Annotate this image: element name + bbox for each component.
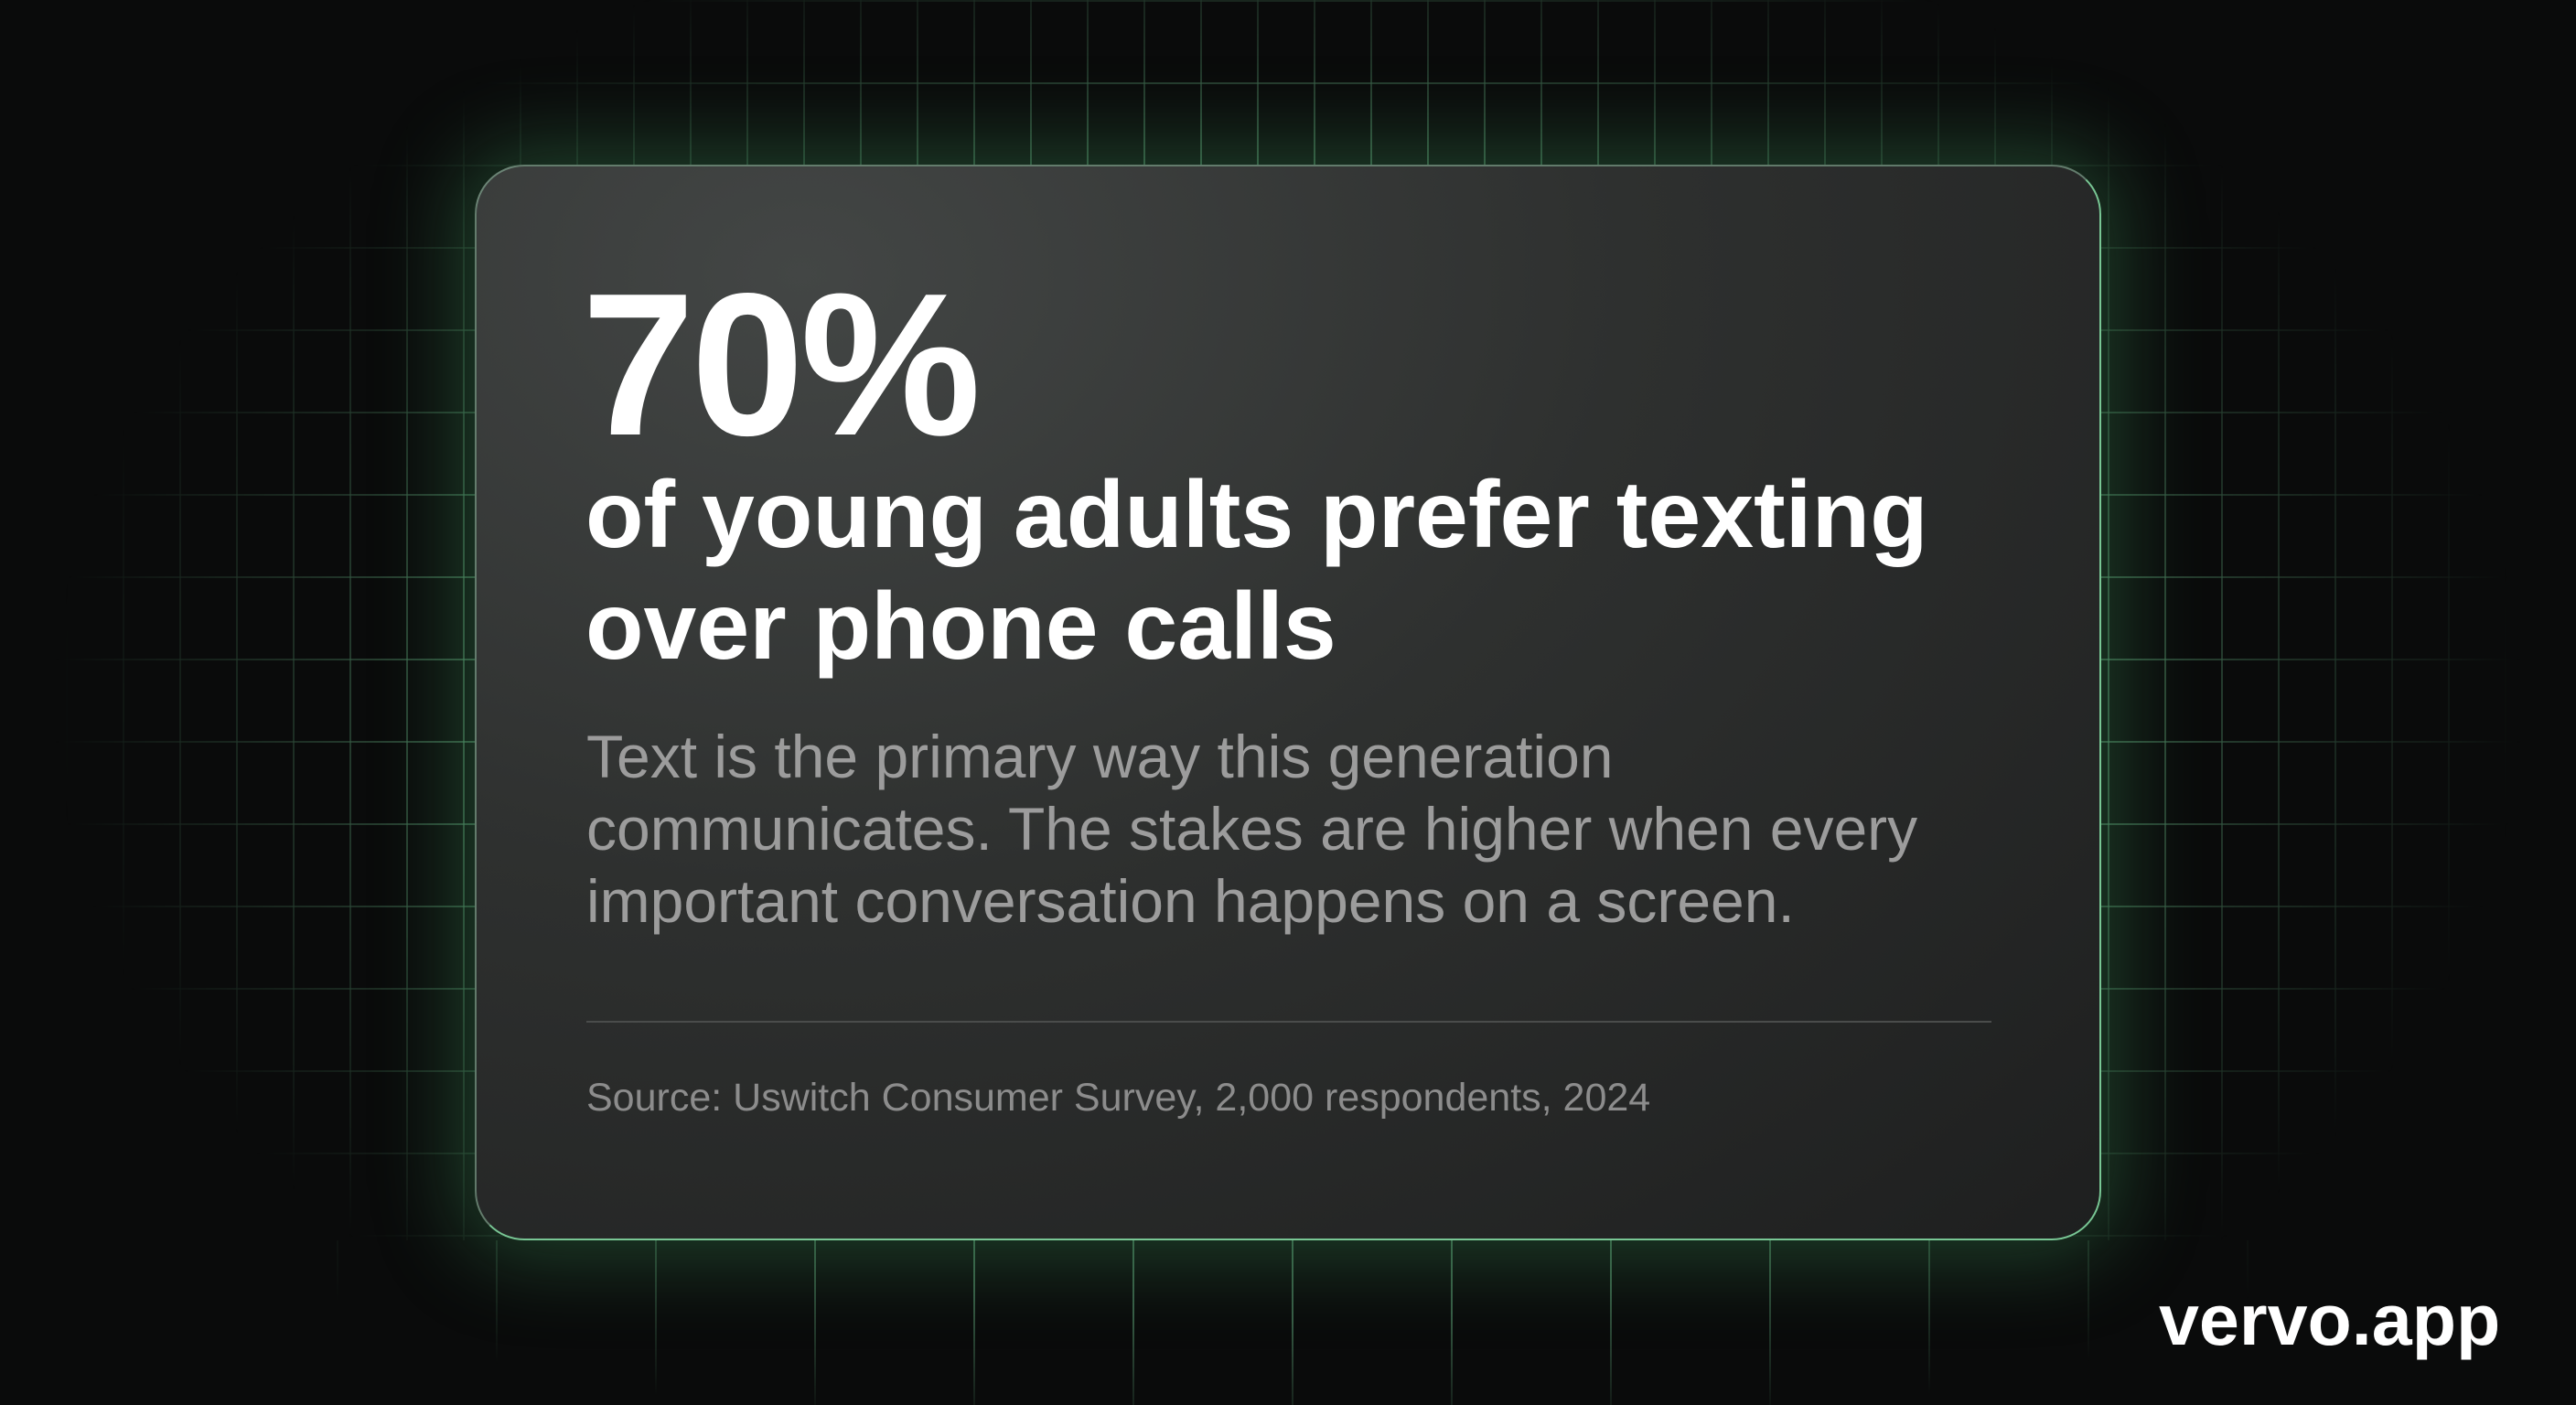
body text: communicates. The stakes are higher when every — [586, 795, 1917, 863]
headline: of young adults prefer texting — [585, 462, 1928, 568]
body text: Text is the primary way this generation — [586, 723, 1613, 790]
body text: important conversation happens on a screen. — [586, 867, 1795, 935]
brand: vervo.app: vervo.app — [2159, 1279, 2500, 1360]
body text — [586, 723, 1917, 935]
big stat 70%: 70% — [582, 252, 977, 478]
panel: stat card — [475, 165, 2101, 1240]
headline: over phone calls — [585, 574, 1336, 680]
headline — [585, 462, 1928, 680]
source note: Source: Uswitch Consumer Survey, 2,000 respondents, 2024 — [586, 1076, 1650, 1120]
